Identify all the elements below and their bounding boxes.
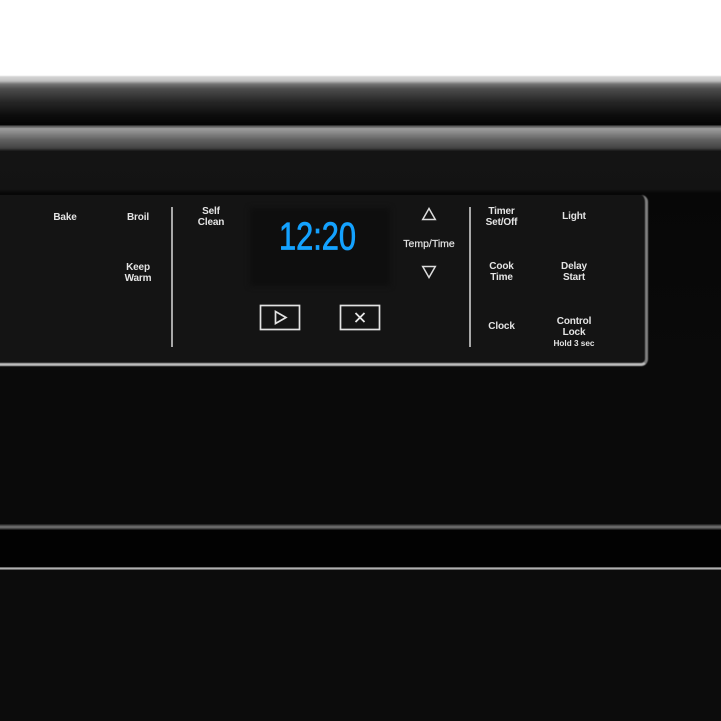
label: Control Lock: [557, 316, 591, 338]
label: Timer Set/Off: [486, 206, 518, 228]
control panel: [0, 195, 648, 366]
label: Cook Time: Time: [490, 272, 513, 282]
label: Temp/Time: Temp/Time: [403, 238, 455, 250]
label: Self Clean: Self: [202, 206, 220, 217]
label: Self Clean: Clean: [198, 216, 224, 228]
label: Broil: Broil: [127, 212, 149, 223]
oven door panel: [0, 570, 721, 721]
label: Delay Start: [561, 261, 587, 282]
label: Self Clean: [198, 206, 224, 228]
icon: down arrow: [422, 266, 436, 279]
icon: up arrow: [422, 207, 436, 220]
oven door highlight line: [0, 567, 721, 570]
label: Keep Warm: Keep: [126, 262, 150, 273]
control housing background: [0, 151, 721, 526]
label: Hold 3 sec: Hold 3 sec: [554, 339, 594, 348]
label: Timer Set/Off: Timer: [488, 206, 515, 217]
panel divider right: [469, 207, 470, 347]
label: Bake: Bake: [53, 212, 77, 223]
panel edge highlight: [0, 195, 648, 366]
display window: [250, 208, 390, 286]
icon: cancel button: [340, 304, 380, 330]
label: Delay Start: Delay: [561, 261, 587, 272]
label: Delay Start: Start: [563, 272, 585, 282]
label: Clock: Clock: [488, 321, 515, 332]
label: Keep Warm: [124, 262, 151, 284]
label: Cook Time: [489, 261, 514, 282]
label: Timer Set/Off: Set/Off: [486, 216, 517, 228]
label: Control Lock: Control: [557, 316, 591, 327]
label: Light: Light: [562, 211, 586, 222]
label: Keep Warm: Warm: [125, 272, 151, 284]
label: Cook Time: Cook: [489, 261, 514, 272]
oven door upper trim: [0, 524, 721, 530]
oven door gap: [0, 530, 721, 567]
label: Control Lock: Lock: [563, 326, 585, 338]
panel divider left: [171, 207, 172, 347]
icon: start button: [260, 304, 300, 330]
range top trim band: [0, 76, 721, 126]
reflective lower trim band: [0, 126, 721, 152]
